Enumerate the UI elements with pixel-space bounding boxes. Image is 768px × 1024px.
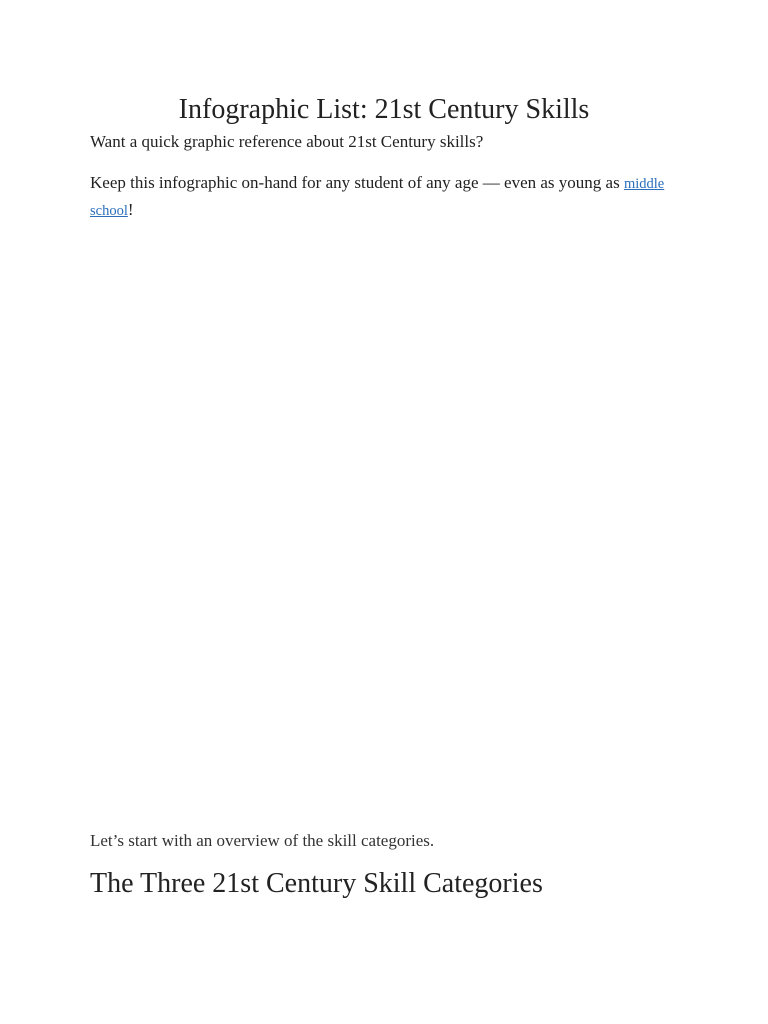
title: Infographic List: 21st Century Skills <box>179 94 589 125</box>
overview text: Let’s start with an overview of the skill categories. <box>90 831 434 850</box>
intro text: Want a quick graphic reference about 21st Century skills? <box>90 132 483 151</box>
intro paragraph with link: Keep this infographic on-hand for any student of any age — even as young as middle school! <box>90 173 664 219</box>
section heading: The Three 21st Century Skill Categories <box>90 868 543 899</box>
